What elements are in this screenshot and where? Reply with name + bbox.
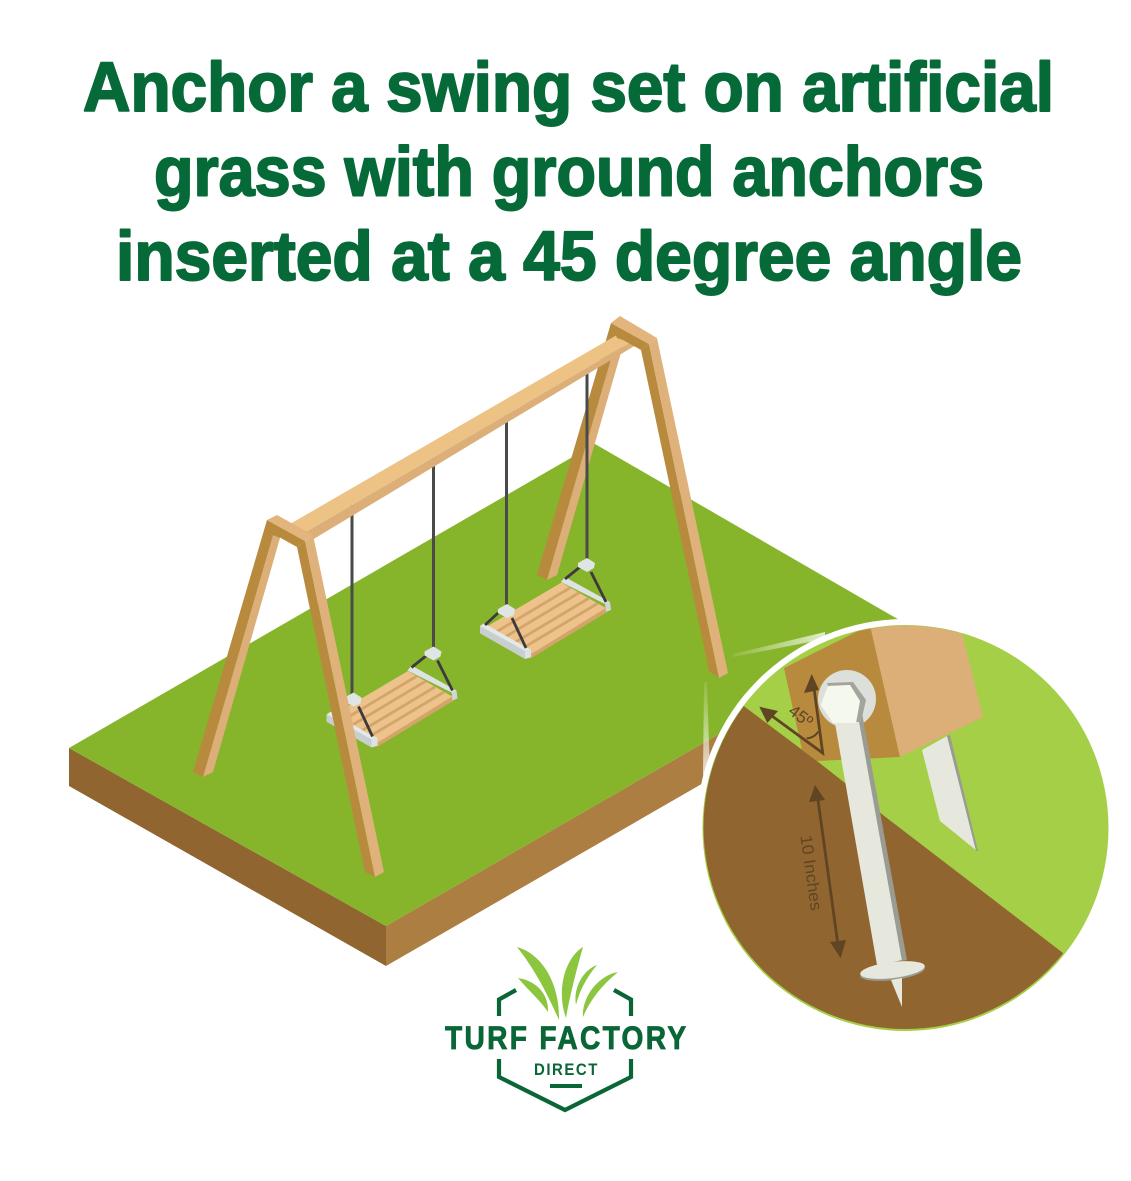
- white ring behind detail circle: [696, 619, 1114, 1037]
- logo bar: [550, 1084, 582, 1088]
- back leg: left frame: [193, 520, 280, 777]
- post end: [784, 625, 983, 761]
- detail circle: anchor close-up: [690, 625, 1108, 1040]
- logo: Turf Factory Direct: [445, 947, 686, 1110]
- back leg: right frame: [537, 323, 624, 580]
- zoom beams: [703, 632, 825, 775]
- angle arrows and label: [759, 674, 823, 753]
- logo subtitle: DIRECT: [534, 1061, 598, 1079]
- isometric turf ground block: [69, 444, 908, 966]
- front leg and cap: right frame: [611, 316, 728, 678]
- second anchor: [922, 735, 978, 851]
- front leg and cap: left frame: [267, 515, 384, 877]
- main anchor: [818, 670, 926, 1007]
- swing set: [193, 316, 728, 877]
- top beam: [290, 332, 636, 540]
- depth arrow and label: 10 Inches: [796, 834, 825, 912]
- logo wordmark: TURF FACTORY: [445, 1021, 686, 1056]
- angle arrows and label: 45º: [785, 701, 816, 731]
- title: inserted at a 45 degree angle: [116, 217, 1022, 295]
- logo hexagon outline: [499, 990, 631, 1110]
- soil section: [704, 706, 1063, 1029]
- depth arrow and label: [796, 785, 846, 958]
- logo grass blades: [517, 947, 618, 1020]
- swing seat: back: [480, 558, 611, 659]
- swing seat: front: [326, 646, 458, 748]
- swing ropes: [352, 370, 587, 697]
- title: grass with ground anchors: [154, 132, 984, 210]
- title: Anchor a swing set on artificial: [83, 48, 1054, 126]
- title: [83, 48, 1054, 295]
